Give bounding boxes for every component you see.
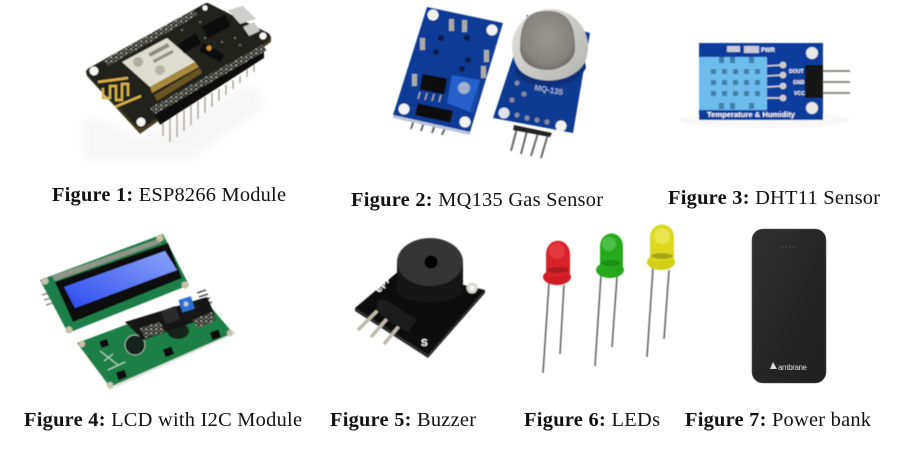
icon: ESP8266 module photo [85, 3, 271, 158]
icon: LCD with I2C module photo [40, 234, 235, 390]
icon: DHT11 sensor photo: DOUT [789, 69, 805, 75]
icon: DHT11 sensor photo: Temperature & Humidity [707, 110, 796, 119]
icon: MQ135 gas sensor photo: MQ-135 [534, 83, 564, 97]
icon: red LED [543, 241, 571, 373]
caption: Figure 5: Figure 5: Buzzer [330, 409, 476, 431]
icon: DHT11 sensor photo: VCC [794, 91, 805, 97]
icon: power bank [752, 229, 826, 383]
icon: DHT11 sensor photo [680, 43, 850, 128]
icon: DHT11 sensor photo: PWR [761, 48, 776, 54]
caption: Figure 2: Figure 2: MQ135 Gas Sensor [351, 189, 603, 211]
icon: MQ135 gas sensor photo [393, 7, 590, 158]
icon: DHT11 sensor photo: GND [793, 80, 805, 86]
caption: Figure 7: Figure 7: Power bank [685, 409, 872, 431]
icon: buzzer photo: S [421, 338, 428, 349]
caption: Figure 4: Figure 4: LCD with I2C Module [24, 409, 302, 431]
caption: Figure 1: Figure 1: ESP8266 Module [52, 184, 286, 206]
icon: yellow LED [647, 224, 675, 357]
icon: buzzer photo: epy [373, 274, 391, 294]
caption: Figure 6: Figure 6: LEDs [524, 409, 660, 431]
caption: Figure 3: Figure 3: DHT11 Sensor [668, 187, 880, 209]
icon: green LED [595, 234, 624, 366]
icon: buzzer photo [355, 238, 485, 358]
icon: power bank: ambrane [778, 363, 808, 372]
